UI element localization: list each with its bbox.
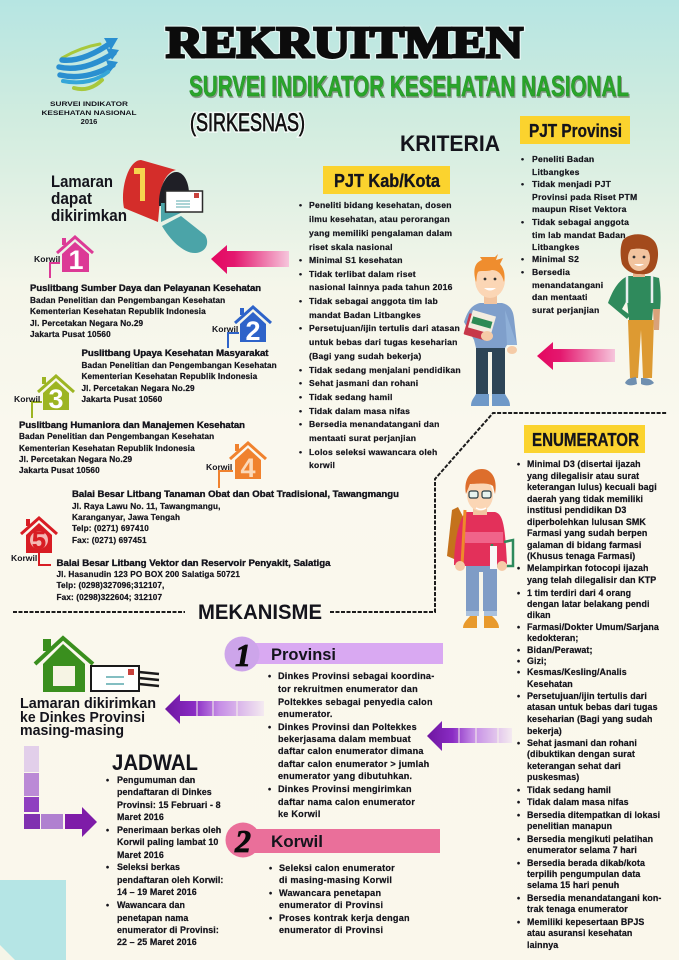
list: Enumerator: (Khusus tenaga Farmasi) <box>527 551 635 561</box>
list: Jadwal: Seleksi berkas <box>117 862 180 872</box>
list: Jadwal: 22 – 25 Maret 2016 <box>117 937 197 947</box>
list: Enumerator: • <box>517 622 520 632</box>
label: PJT Kab/Kota: PJT Kab/Kota <box>334 171 441 191</box>
list: Jadwal: Maret 2016 <box>117 850 164 860</box>
list: Provinsi: Dinkes Provinsi dan Poltekkes <box>278 722 417 732</box>
list: Enumerator: bekerja) <box>527 726 562 736</box>
korwil 5 address: Fax: (0298)322604; 312107 <box>56 593 162 602</box>
list: Enumerator: • <box>517 917 520 927</box>
list: Provinsi: tor rekruitmen enumerator dan <box>278 684 418 694</box>
korwil 3 address <box>19 420 245 475</box>
list: Enumerator: • <box>517 645 520 655</box>
text: Lamaran dapat dikirimkan: Lamaran <box>51 173 113 191</box>
list: Enumerator: • <box>517 785 520 795</box>
korwil 4 address: Jl. Raya Lawu No. 11, Tawangmangu, <box>72 502 220 511</box>
heading: Kriteria: KRITERIA <box>400 131 500 156</box>
korwil 2 address: Badan Penelitian dan Pengembangan Kesehatan <box>82 361 277 370</box>
text: Lamaran dikirimkan ke Dinkes Provinsi <box>20 695 156 739</box>
korwil 3 house: 3 <box>48 384 64 414</box>
list: Enumerator: Tidak sedang hamil <box>527 785 611 795</box>
list: Enumerator: Farmasi yang sudah berpen <box>527 528 647 538</box>
text: Lamaran dikirimkan ke Dinkes Provinsi: ke Dinkes Provinsi <box>20 709 145 726</box>
header: 2 Korwil <box>226 822 440 859</box>
korwil 2 house: Korwil <box>212 324 238 334</box>
list: Jadwal: Maret 2016 <box>117 812 164 822</box>
list: Enumerator: Sehat jasmani dan rohani <box>527 738 637 748</box>
list: PJT Kab/Kota: mandat Badan Litbangkes <box>309 310 421 320</box>
list: Korwil: Wawancara penetapan <box>279 888 381 898</box>
list: Enumerator: Gizi; <box>527 656 547 666</box>
korwil 5 house: 5 <box>32 527 46 555</box>
list: Enumerator: terpilih pengumpulan data <box>527 869 640 879</box>
korwil 1 address: Badan Penelitian dan Pengembangan Kesehatan <box>30 296 225 305</box>
list: Korwil: • <box>269 913 272 923</box>
logo: Survei Indikator Kesehatan Nasional 2016: KESEHATAN NASIONAL <box>42 110 136 117</box>
arrow: L-shaped to Jadwal <box>24 746 97 837</box>
heading: Mekanisme: MEKANISME <box>198 601 322 624</box>
korwil 5 address: Telp: (0298)327096;312107, <box>56 581 164 590</box>
list: PJT Provinsi: Tidak menjadi PJT <box>532 179 612 189</box>
list: PJT Provinsi: dan mentaati <box>532 292 588 302</box>
list: PJT Kab/Kota: Tidak sedang menjalani pendidikan <box>309 365 461 375</box>
korwil 1 address <box>30 283 261 339</box>
label: PJT Provinsi <box>520 116 630 144</box>
list: PJT Kab/Kota: nasional lainnya pada tahun 2016 <box>309 282 453 292</box>
list: PJT Kab/Kota: Sehat jasmani dan rohani <box>309 378 418 388</box>
list: PJT Provinsi: Bersedia <box>532 267 570 277</box>
korwil 4 address <box>72 489 399 545</box>
list: Enumerator: galaman di bidang farmasi <box>527 540 641 550</box>
list: Enumerator: Bersedia mengikuti pelatihan <box>527 834 653 844</box>
list: Enumerator: Farmasi/Dokter Umum/Sarjana <box>527 622 659 632</box>
list: Enumerator: yang telah dilegalisir dan KTP <box>527 575 656 585</box>
decorative corner block <box>0 880 66 960</box>
list: Enumerator: • <box>517 797 520 807</box>
logo: Survei Indikator Kesehatan Nasional 2016: 2016 <box>81 117 97 126</box>
list: PJT Provinsi: Litbangkes <box>532 242 580 252</box>
list: PJT Kab/Kota: • <box>299 447 302 457</box>
list: Enumerator: (dibuktikan dengan surat <box>527 749 635 759</box>
illustration: woman <box>608 234 661 385</box>
list: Jadwal: pendaftaran di Dinkes <box>117 787 212 797</box>
list: Enumerator: atau asuransi kesehatan <box>527 928 632 938</box>
list: Provinsi <box>268 671 434 819</box>
header: 2 Korwil: 2 <box>234 823 251 859</box>
korwil 5 house <box>11 518 57 565</box>
list: PJT Provinsi: Minimal S2 <box>532 254 579 264</box>
korwil 5 address <box>56 558 331 602</box>
list: Enumerator: dikan <box>527 610 551 620</box>
list: PJT Kab/Kota: (Bagi yang sudah bekerja) <box>309 351 421 361</box>
icon: mailbox <box>123 160 207 253</box>
korwil 1 address: Kementerian Kesehatan Republik Indonesia <box>30 307 206 316</box>
list: Enumerator: Bersedia berada dikab/kota <box>527 858 645 868</box>
list: Provinsi: daftar calon enumerator > jumlah <box>278 759 429 769</box>
arrow: to mailbox <box>211 245 289 274</box>
korwil 1 address: Jl. Percetakan Negara No.29 <box>30 319 144 328</box>
list: Provinsi: • <box>268 722 271 732</box>
heading: Jadwal: JADWAL <box>112 750 198 775</box>
list: Jadwal: • <box>106 825 109 835</box>
list: PJT Kab/Kota: Tidak dalam masa nifas <box>309 406 410 416</box>
list: Provinsi: daftar nama calon enumerator <box>278 797 415 807</box>
list: Enumerator: enumerator selama 7 hari <box>527 845 637 855</box>
list: Jadwal: Wawancara dan <box>117 900 185 910</box>
list: Enumerator: • <box>517 667 520 677</box>
list: PJT Kab/Kota: • <box>299 406 302 416</box>
korwil 1 house: 1 <box>68 245 84 275</box>
header: 1 Provinsi <box>224 636 443 673</box>
korwil 2 address: Kementerian Kesehatan Republik Indonesia <box>82 372 258 381</box>
korwil 2 address <box>82 348 277 404</box>
list: Enumerator: Kesmas/Kesling/Analis <box>527 667 627 677</box>
korwil 3 house: Korwil <box>14 394 40 404</box>
korwil 2 address: Jakarta Pusat 10560 <box>82 395 163 404</box>
list: PJT Provinsi: • <box>521 154 524 164</box>
text: Lamaran dapat dikirimkan <box>51 173 127 225</box>
list: PJT Provinsi: • <box>521 254 524 264</box>
list: Enumerator: keterangan sehat dari <box>527 761 621 771</box>
label: Enumerator: ENUMERATOR <box>532 430 639 450</box>
list: Jadwal: • <box>106 775 109 785</box>
korwil 1 address: Jakarta Pusat 10560 <box>30 330 111 339</box>
list: PJT Kab/Kota: • <box>299 378 302 388</box>
korwil 2 address: Jl. Percetakan Negara No.29 <box>82 384 195 393</box>
list: Provinsi: Dinkes Provinsi mengirimkan <box>278 784 412 794</box>
list: Enumerator: selama 15 hari penuh <box>527 880 619 890</box>
list: Enumerator: • <box>517 563 520 573</box>
list: Enumerator <box>517 459 661 950</box>
korwil 1 house <box>34 237 93 278</box>
list: PJT Kab/Kota: Tidak sebagai anggota tim lab <box>309 296 438 306</box>
list: Jadwal: Provinsi: 15 Februari - 8 <box>117 800 221 810</box>
list: Enumerator: atasan untuk bebas dari tugas <box>527 702 658 712</box>
korwil 4 house <box>206 443 266 488</box>
list: Enumerator: institusi pendidikan D3 <box>527 505 626 515</box>
korwil 4 house: Korwil <box>206 462 232 472</box>
list: Korwil: enumerator di Provinsi <box>279 925 383 935</box>
list: PJT Kab/Kota: Persetujuan/ijin tertulis dari atasan <box>309 323 460 333</box>
list: Enumerator: trak tenaga enumerator <box>527 904 628 914</box>
korwil 3 address: Badan Penelitian dan Pengembangan Kesehatan <box>19 432 214 441</box>
list: Enumerator: yang dilegalisir atau surat <box>527 471 639 481</box>
list: Enumerator: diperbolehkan lulusan SMK <box>527 517 646 527</box>
list: Enumerator: daerah yang tidak memiliki <box>527 494 643 504</box>
list: Jadwal: Penerimaan berkas oleh <box>117 825 221 835</box>
korwil 2 address: Puslitbang Upaya Kesehatan Masyarakat <box>82 348 269 358</box>
list: Enumerator: • <box>517 810 520 820</box>
list: PJT Kab/Kota: Minimal S1 kesehatan <box>309 255 403 265</box>
icon: green house and envelope <box>35 638 159 692</box>
list: PJT Kab/Kota: • <box>299 296 302 306</box>
korwil 3 address: Puslitbang Humaniora dan Manajemen Kesehatan <box>19 420 245 430</box>
list: Enumerator: keseharian (Bagi yang sudah <box>527 714 653 724</box>
title: REKRUITMEN <box>166 18 523 67</box>
korwil 4 address: Fax: (0271) 697451 <box>72 536 147 545</box>
list: Jadwal: penetapan nama <box>117 913 188 923</box>
list: Enumerator: • <box>517 893 520 903</box>
arrow: purple from Enumerator <box>427 721 512 751</box>
list: PJT Provinsi: • <box>521 179 524 189</box>
list: PJT Kab/Kota: • <box>299 419 302 429</box>
list: Enumerator: Melampirkan fotocopi ijazah <box>527 563 649 573</box>
korwil 2 house: 2 <box>245 316 261 346</box>
list: Provinsi: daftar calon enumerator dimana <box>278 746 424 756</box>
list: Provinsi: enumerator. <box>278 709 333 719</box>
list: Enumerator: Memiliki kepesertaan BPJS <box>527 917 644 927</box>
list: Enumerator: • <box>517 588 520 598</box>
list: Enumerator: • <box>517 459 520 469</box>
label: PJT Kab/Kota <box>323 166 450 194</box>
list: Korwil: Proses kontrak kerja dengan <box>279 913 410 923</box>
korwil 5 address: Balai Besar Litbang Vektor dan Reservoir Penyakit, Salatiga <box>56 558 331 568</box>
list: Enumerator: Persetujuan/ijin tertulis dari <box>527 691 647 701</box>
list: PJT Kab/Kota: • <box>299 323 302 333</box>
list: Enumerator: puskesmas) <box>527 772 579 782</box>
korwil 4 address: Telp: (0271) 697410 <box>72 524 149 533</box>
korwil 1 house: Korwil <box>34 254 60 264</box>
list: PJT Kab/Kota: Bersedia menandatangani dan <box>309 419 440 429</box>
list: PJT Provinsi: menandatangani <box>532 280 603 290</box>
list: Enumerator: Kesehatan <box>527 679 573 689</box>
list: Provinsi: Dinkes Provinsi sebagai koordina- <box>278 671 434 681</box>
list: PJT Kab/Kota: Lolos seleksi wawancara oleh <box>309 447 437 457</box>
header: 1 Provinsi: 1 <box>235 637 251 673</box>
list: PJT Kab/Kota: ilmu kesehatan, atau perorangan <box>309 214 450 224</box>
logo: Survei Indikator Kesehatan Nasional 2016: SURVEI INDIKATOR <box>50 101 128 108</box>
list: Provinsi: Poltekkes sebagai penyedia calon <box>278 697 433 707</box>
list: Enumerator: kedokteran; <box>527 633 578 643</box>
list: PJT Kab/Kota: • <box>299 392 302 402</box>
korwil 1 address: Puslitbang Sumber Daya dan Pelayanan Kesehatan <box>30 283 261 293</box>
logo: Survei Indikator Kesehatan Nasional 2016 <box>42 38 136 126</box>
list: PJT Kab/Kota: • <box>299 269 302 279</box>
list: Enumerator: penelitian manapun <box>527 821 612 831</box>
list: Enumerator: keterangan lulus) kecuali bagi <box>527 482 657 492</box>
list: Jadwal: • <box>106 900 109 910</box>
list: PJT Provinsi: Tidak sebagai anggota <box>532 217 629 227</box>
list: Enumerator: • <box>517 834 520 844</box>
list: Enumerator: • <box>517 656 520 666</box>
list: Korwil: Seleksi calon enumerator <box>279 863 395 873</box>
list: Enumerator: Bersedia menandatangani kon- <box>527 893 661 903</box>
list: Jadwal: pendaftaran oleh Korwil: <box>117 875 223 885</box>
list: Korwil: • <box>269 863 272 873</box>
list: PJT Provinsi: surat perjanjian <box>532 305 600 315</box>
list: PJT Kab/Kota: untuk bebas dari tugas keseharian <box>309 337 458 347</box>
list: PJT Provinsi: • <box>521 267 524 277</box>
text: Lamaran dikirimkan ke Dinkes Provinsi: masing-masing <box>20 722 124 739</box>
list: Enumerator: • <box>517 738 520 748</box>
text: Lamaran dapat dikirimkan: dapat <box>51 190 92 208</box>
list: PJT Provinsi: maupun Riset Vektora <box>532 204 627 214</box>
subtitle: Sirkesnas: (SIRKESNAS) <box>190 109 305 137</box>
korwil 3 address: Jl. Percetakan Negara No.29 <box>19 455 133 464</box>
list: PJT Kab/Kota: • <box>299 255 302 265</box>
korwil 3 address: Jakarta Pusat 10560 <box>19 466 100 475</box>
list: Enumerator: • <box>517 858 520 868</box>
korwil 3 house <box>14 376 74 418</box>
dashed divider <box>13 413 667 612</box>
list: Enumerator: • <box>517 691 520 701</box>
list: PJT Kab/Kota: Tidak terlibat dalam riset <box>309 269 416 279</box>
list: PJT Provinsi: tim lab mandat Badan <box>532 230 626 240</box>
list: PJT Provinsi: Litbangkes <box>532 167 580 177</box>
list: Korwil: enumerator di Provinsi <box>279 900 383 910</box>
list: Enumerator: Bersedia ditempatkan di lokasi <box>527 810 660 820</box>
list: Jadwal: • <box>106 862 109 872</box>
list: Korwil: di masing-masing Korwil <box>279 875 392 885</box>
illustration: man with books <box>463 254 517 406</box>
arrow: from PJT Provinsi <box>537 342 615 370</box>
korwil 4 address: Karanganyar, Jawa Tengah <box>72 513 180 522</box>
list: Jadwal: Pengumuman dan <box>117 775 195 785</box>
list: Enumerator: 1 tim terdiri dari 4 orang <box>527 588 631 598</box>
list: PJT Kab/Kota: Peneliti bidang kesehatan, dosen <box>309 200 452 210</box>
list: Provinsi: • <box>268 784 271 794</box>
text: Lamaran dapat dikirimkan: dikirimkan <box>51 207 127 225</box>
subtitle: Sirkesnas: (SIRKESNAS) <box>190 109 305 137</box>
list: PJT Kab/Kota: korwil <box>309 460 335 470</box>
header: 1 Provinsi: Provinsi <box>271 645 336 664</box>
illustration: man with backpack <box>447 469 513 628</box>
list: PJT Provinsi: Peneliti Badan <box>532 154 594 164</box>
list: PJT Provinsi <box>521 154 637 315</box>
list: Enumerator: Tidak dalam masa nifas <box>527 797 629 807</box>
list: Jadwal: Korwil paling lambat 10 <box>117 837 218 847</box>
list: PJT Kab/Kota: mentaati surat perjanjian <box>309 433 416 443</box>
korwil 3 address: Kementerian Kesehatan Republik Indonesia <box>19 444 195 453</box>
list: PJT Kab/Kota <box>299 200 461 470</box>
label: Enumerator <box>524 425 645 453</box>
title: REKRUITMEN <box>166 18 523 67</box>
list: Jadwal: 14 – 19 Maret 2016 <box>117 887 197 897</box>
list: Provinsi: bekerjasama dalam membuat <box>278 734 411 744</box>
list: PJT Kab/Kota: Tidak sedang hamil <box>309 392 393 402</box>
list: Korwil: • <box>269 888 272 898</box>
list: Enumerator: lainnya <box>527 940 558 950</box>
list: PJT Provinsi: • <box>521 217 524 227</box>
label: PJT Provinsi: PJT Provinsi <box>529 121 622 141</box>
list: PJT Provinsi: Provinsi pada Riset PTM <box>532 192 637 202</box>
korwil 4 address: Balai Besar Litbang Tanaman Obat dan Obat Tradisional, Tawangmangu <box>72 489 399 499</box>
text: Lamaran dikirimkan ke Dinkes Provinsi: Lamaran dikirimkan <box>20 695 156 712</box>
list: Enumerator: Bidan/Perawat; <box>527 645 593 655</box>
korwil 5 house: Korwil <box>11 553 37 563</box>
header: 2 Korwil: Korwil <box>271 832 323 851</box>
korwil 4 house: 4 <box>240 453 256 483</box>
korwil 2 house <box>212 307 271 348</box>
list: PJT Kab/Kota: • <box>299 200 302 210</box>
list: PJT Kab/Kota: riset skala nasional <box>309 242 393 252</box>
list: Provinsi: • <box>268 671 271 681</box>
list: Jadwal: enumerator di Provinsi: <box>117 925 219 935</box>
list: PJT Kab/Kota: yang memiliki pengalaman dalam <box>309 228 452 238</box>
list: PJT Kab/Kota: • <box>299 365 302 375</box>
list: Enumerator: Minimal D3 (disertai ijazah <box>527 459 641 469</box>
list: Provinsi: ke Korwil <box>278 809 321 819</box>
korwil 5 address: Jl. Hasanudin 123 PO BOX 200 Salatiga 50721 <box>56 570 240 579</box>
arrow: purple to Lamaran <box>165 694 264 724</box>
list: Jadwal <box>106 775 223 947</box>
list: Enumerator: dengan latar belakang pendi <box>527 599 650 609</box>
list: Provinsi: enumerator yang dibutuhkan. <box>278 771 412 781</box>
list: Korwil <box>269 863 410 935</box>
